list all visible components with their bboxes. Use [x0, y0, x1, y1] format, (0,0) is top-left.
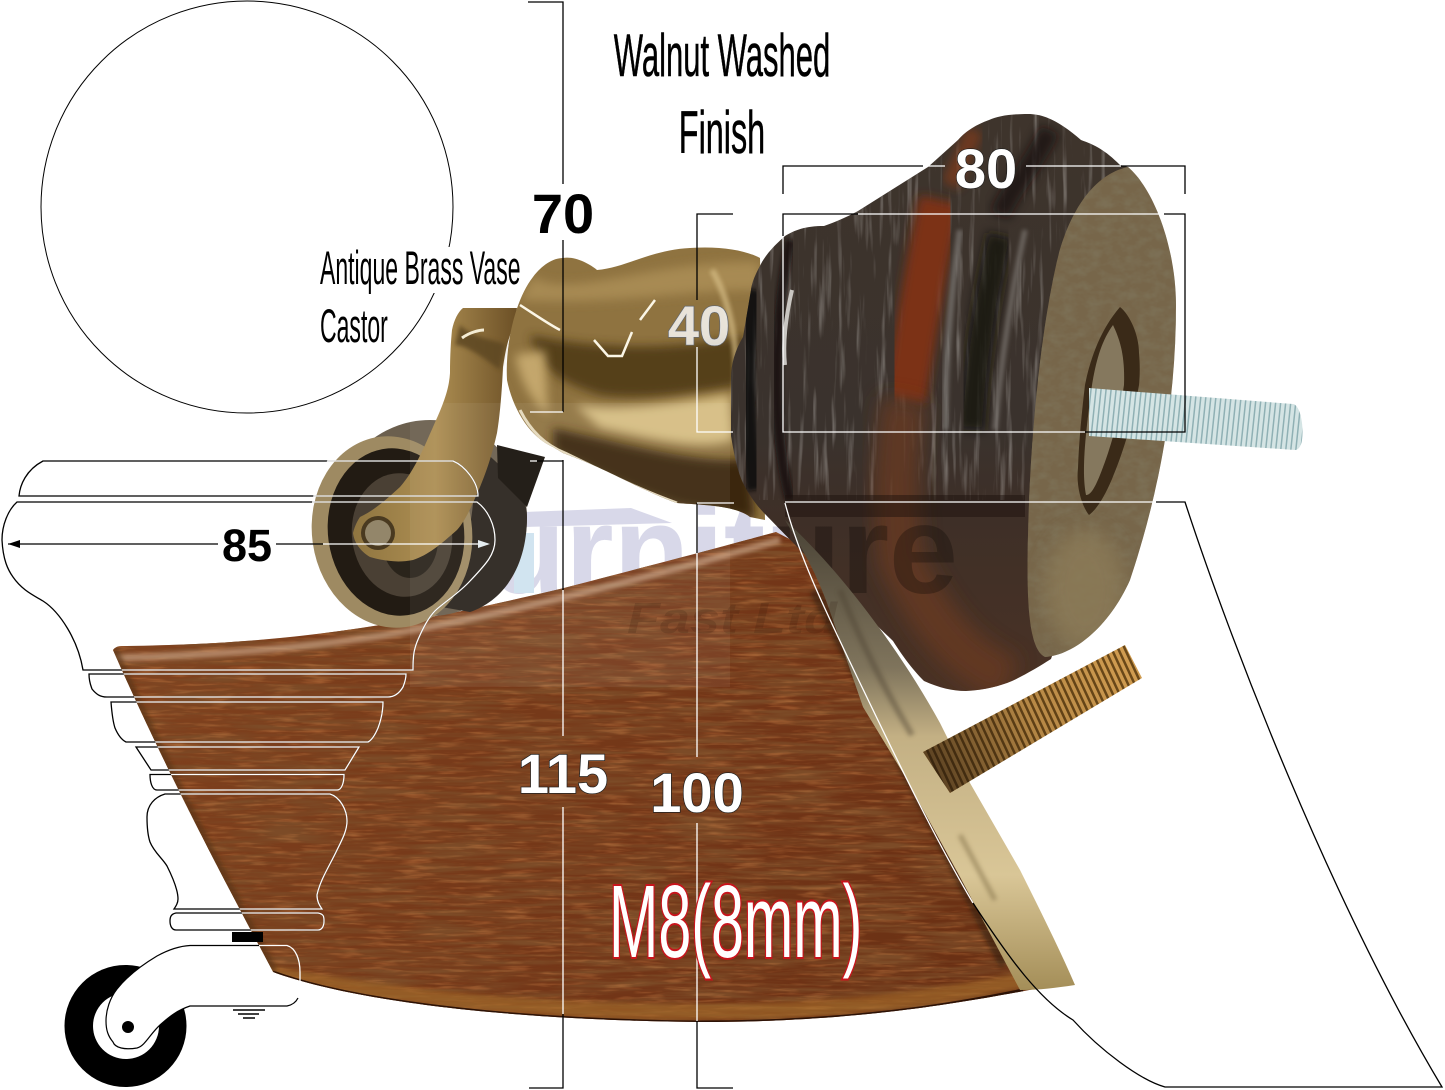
dimension: 40: 40 — [668, 294, 730, 357]
dimension: 80: 80 — [955, 137, 1017, 200]
dimension: 115: 115 — [518, 742, 608, 805]
dimension: 70: 70 — [532, 182, 594, 245]
label: castor — [319, 242, 522, 352]
brass castor wheel — [299, 420, 527, 638]
label: finish: Finish — [679, 99, 765, 167]
watermark: Furniture: Furniture — [414, 481, 958, 620]
dimension: 85: 85 — [222, 520, 272, 571]
brass vase neck — [506, 248, 765, 520]
wood wedge base — [100, 520, 1060, 1030]
thread size label: M8(8mm) — [609, 864, 862, 979]
wedge end plate — [785, 520, 1075, 990]
walnut foot body — [731, 114, 1128, 691]
dimension lines — [528, 2, 1185, 1088]
label: castor: Antique Brass Vase — [320, 242, 521, 294]
label: castor: Castor — [320, 300, 388, 352]
circle outline — [41, 1, 453, 413]
castor stem connector — [497, 445, 545, 507]
walnut foot body: Furniture — [414, 481, 958, 620]
castor drawing icon — [64, 932, 300, 1087]
technical line drawing of leg — [2, 461, 495, 930]
brass swivel arm — [353, 308, 517, 561]
long curved outline — [785, 502, 1442, 1087]
steel threaded bolt — [1089, 388, 1303, 450]
foot end disc with hole — [1020, 160, 1180, 660]
watermark overlay tint: Fast Ltd — [627, 594, 838, 643]
dimension: 85 — [8, 520, 490, 571]
label: finish: Walnut Washed — [614, 23, 830, 90]
label: finish — [614, 23, 830, 167]
watermark overlay tint — [410, 403, 838, 687]
dimension: 100: 100 — [650, 761, 744, 824]
brass threaded bolt — [923, 645, 1142, 793]
